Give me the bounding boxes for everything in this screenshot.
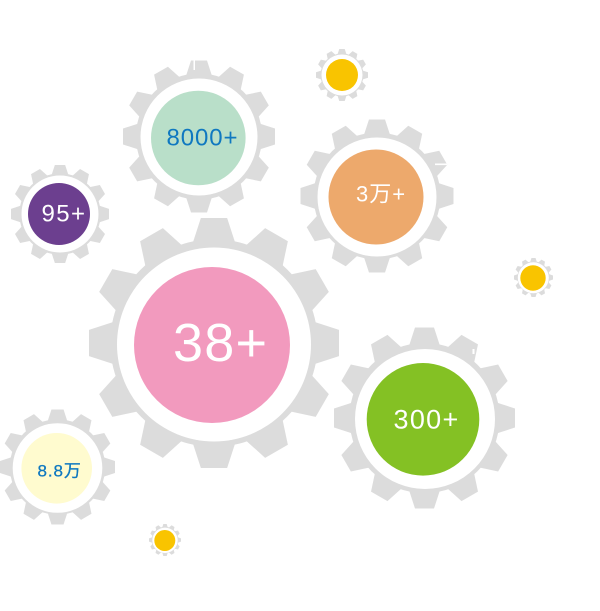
small yellow gear: right [514, 258, 553, 297]
gear: 8.8万 [0, 410, 115, 524]
gear: 8000+: 8000+ [166, 124, 238, 152]
gear: 3万+: 3万+ [356, 182, 406, 206]
gear: 3万+ [300, 120, 454, 272]
gear: 300+: 300+ [394, 404, 460, 434]
small yellow gear: top [316, 49, 368, 101]
gear: 38+ [89, 218, 339, 468]
gear: 8000+ [123, 60, 275, 212]
gear: 300+ [334, 328, 515, 508]
gear: 38+: 38+ [173, 313, 268, 373]
small yellow gear: bottom [149, 524, 181, 556]
gear: 8.8万: 8.8万 [38, 462, 82, 480]
gear: 95+ [11, 165, 109, 263]
gear: 95+: 95+ [42, 200, 86, 228]
